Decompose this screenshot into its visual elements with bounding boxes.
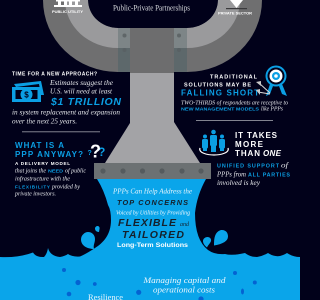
text: what is a ppp anyway: infrastructure with the — [15, 176, 70, 182]
text: time for a new approach: in system replacement and expansion — [12, 110, 121, 116]
icon: dollar bills: $ — [24, 90, 29, 100]
icon: public utility building — [54, 0, 82, 7]
text: what is a ppp anyway: private investors. — [14, 190, 56, 198]
icon: water drops left — [81, 226, 100, 249]
text: managing capital and operational costs — [142, 276, 227, 294]
text: it takes more than one: IT TAKES — [235, 131, 278, 140]
text: what is a ppp anyway: that joins the — [15, 168, 46, 174]
icon: question marks — [88, 142, 105, 162]
pipe: left elbow — [43, 0, 130, 72]
text: traditional solutions falling short: FALLING SHORT — [181, 88, 259, 98]
text: time for a new approach: Estimates suggest the — [49, 80, 113, 87]
icon: private sector arrow — [226, 0, 247, 9]
text: traditional solutions falling short: SOLUTIONS MAY BE — [184, 82, 251, 88]
label: public utility: PUBLIC UTILITY — [52, 10, 84, 14]
text: funnel message: PPPs Can Help Address the — [112, 188, 192, 196]
text: time for a new approach: $1 TRILLION — [50, 96, 121, 108]
text: traditional solutions falling short — [181, 74, 288, 112]
text: it takes more than one: PPPs from — [216, 172, 246, 178]
text: what is a ppp anyway — [14, 141, 86, 198]
water: funnel stream and pool — [0, 179, 300, 300]
text: time for a new approach: over the next 25 years. — [12, 118, 77, 126]
text: what is a ppp anyway: PPP ANYWAY? — [15, 150, 83, 159]
text: time for a new approach: U.S. will need at least — [50, 88, 113, 96]
text: what is a ppp anyway: provided by — [51, 184, 80, 190]
text: it takes more than one — [216, 131, 290, 187]
text: what is a ppp anyway: WHAT IS A — [15, 141, 64, 150]
text: funnel message — [112, 188, 192, 249]
text: funnel message: TAILORED — [122, 229, 184, 241]
pipe: right elbow — [174, 0, 262, 72]
text: it takes more than one: of — [281, 162, 289, 170]
label: private sector: PRIVATE SECTOR — [218, 11, 252, 15]
text: time for a new approach — [12, 72, 121, 126]
text: it takes more than one: involved is key — [217, 180, 261, 187]
pipe: central funnel — [105, 28, 200, 163]
text: traditional solutions falling short: NEW MANAGEMENT MODELS — [181, 106, 259, 112]
heading: public-private partnerships: Public-Private Partnerships — [113, 2, 190, 12]
text: it takes more than one: ALL PARTIES — [248, 172, 290, 178]
dividers — [22, 120, 273, 132]
icon: dollar bills — [12, 81, 44, 102]
text: funnel message: FLEXIBLE — [118, 217, 177, 229]
icon: target and darts — [256, 66, 287, 96]
text: funnel message: and — [180, 222, 190, 228]
text: it takes more than one: ONE — [263, 149, 282, 158]
text: traditional solutions falling short: like PPPs — [261, 106, 284, 112]
icon: question marks: ? — [88, 150, 92, 157]
text: funnel message: TOP CONCERNS — [117, 198, 188, 207]
text: managing capital and operational costs: Managing capital and — [142, 276, 227, 285]
bubbles — [62, 268, 257, 300]
text: traditional solutions falling short: TWO-THIRDS of respondents are receptive to — [181, 100, 288, 106]
pipe: bolted flange — [94, 163, 211, 179]
icon: water drops right — [203, 230, 228, 248]
text: time for a new approach: TIME FOR A NEW APPROACH? — [12, 72, 97, 78]
text: what is a ppp anyway: of public — [65, 168, 86, 174]
text: what is a ppp anyway: FLEXIBILITY — [15, 184, 50, 190]
icon: question marks: ? — [98, 145, 105, 159]
text: managing capital and operational costs: operational costs — [153, 286, 215, 294]
icon: question marks: ? — [90, 142, 101, 162]
text: it takes more than one: UNIFIED SUPPORT — [217, 164, 280, 170]
text: what is a ppp anyway: NEED — [48, 168, 64, 174]
text: it takes more than one: MORE — [235, 140, 264, 149]
text: what is a ppp anyway: A DELIVERY MODEL — [15, 161, 70, 166]
icon: three people in a ring — [200, 130, 228, 155]
text: traditional solutions falling short: TRADITIONAL — [210, 74, 258, 80]
text: it takes more than one: THAN — [235, 149, 260, 158]
text: funnel message: Long-Term Solutions — [117, 242, 188, 249]
text: funnel message: Voiced by Utilities by Providing — [116, 210, 190, 216]
